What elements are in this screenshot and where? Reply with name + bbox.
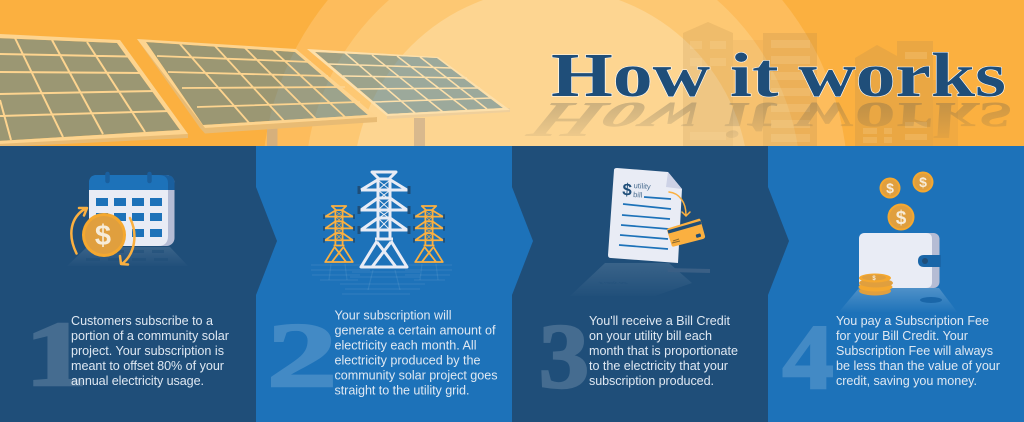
text: step 4: be less than the value of your: [836, 359, 1000, 373]
solar panel 2 post: [267, 127, 278, 147]
chevron arrow 1: [256, 187, 277, 295]
icon: utility bill and card: $: [622, 180, 633, 200]
text: step 3: subscription produced.: [589, 374, 714, 388]
title: How it works: [551, 42, 1006, 110]
icon: transmission towers: [311, 172, 452, 294]
text: step 3: You'll receive a Bill Credit: [589, 314, 730, 328]
text: step 1: meant to offset 80% of your: [71, 359, 224, 373]
text: step 4: You pay a Subscription Fee: [836, 314, 989, 328]
panel: step 3: [512, 146, 768, 422]
title reflection: How: [514, 92, 721, 148]
text: step 2: community solar project goes: [334, 368, 498, 382]
icon: calendar with coin: $: [95, 220, 111, 252]
numeral 4: 4: [782, 306, 834, 408]
text: step 3: to the electricity that your: [589, 359, 728, 373]
solar panel 2: [137, 39, 377, 134]
numeral 2: 2: [267, 304, 337, 406]
icon: utility bill and card: [570, 168, 710, 296]
text: step 4: for your Bill Credit. Your: [836, 329, 968, 343]
text: step 1: annual electricity usage.: [71, 374, 204, 388]
icon: utility bill and card: utility: [633, 181, 651, 191]
buildings silhouette: [683, 22, 958, 147]
title reflection: [514, 92, 1013, 148]
solar panel 1: [0, 34, 188, 147]
title reflection: it: [717, 92, 781, 148]
icon: wallet with coins: $: [872, 276, 876, 282]
text: step 1: project. Your subscription is: [71, 344, 224, 358]
text: step 4: Subscription Fee will always: [836, 344, 993, 358]
text: step 2: electricity each month. All: [334, 338, 476, 352]
numeral 1: 1: [25, 303, 88, 405]
icon: calendar with coin: [67, 174, 188, 266]
text: step 2: Your subscription will: [334, 308, 452, 322]
solar panel 3: [307, 49, 510, 119]
text: step 3: month that is proportionate: [589, 344, 738, 358]
text: step 1: portion of a community solar: [71, 329, 229, 343]
text: step 2: straight to the utility grid.: [334, 384, 470, 398]
text: step 4: credit, saving you money.: [836, 374, 977, 388]
panel: step 2: [256, 146, 512, 422]
panel: step 1: [0, 146, 256, 422]
sun glow circles: [262, 0, 848, 422]
text: step 2: generate a certain amount of: [334, 324, 496, 338]
icon: utility bill and card: $ utility bill: [596, 281, 629, 284]
numeral 3: 3: [539, 305, 589, 407]
panel: step 4: [768, 146, 1024, 422]
text: step 2: electricity produced by the: [334, 354, 480, 368]
icon: wallet with coins: $: [896, 208, 907, 229]
text: step 1: Customers subscribe to a: [71, 314, 213, 328]
text: step 3: on your utility bill each: [589, 329, 712, 343]
solar panel 3 post: [414, 118, 425, 147]
chevron arrow 3: [768, 187, 789, 295]
icon: wallet with coins: [838, 172, 958, 313]
chevron arrow 2: [512, 187, 533, 295]
icon: wallet with coins: $: [886, 180, 894, 196]
title reflection: works: [792, 92, 1013, 148]
icon: utility bill and card: bill: [633, 190, 643, 200]
icon: wallet with coins: $: [919, 174, 927, 190]
